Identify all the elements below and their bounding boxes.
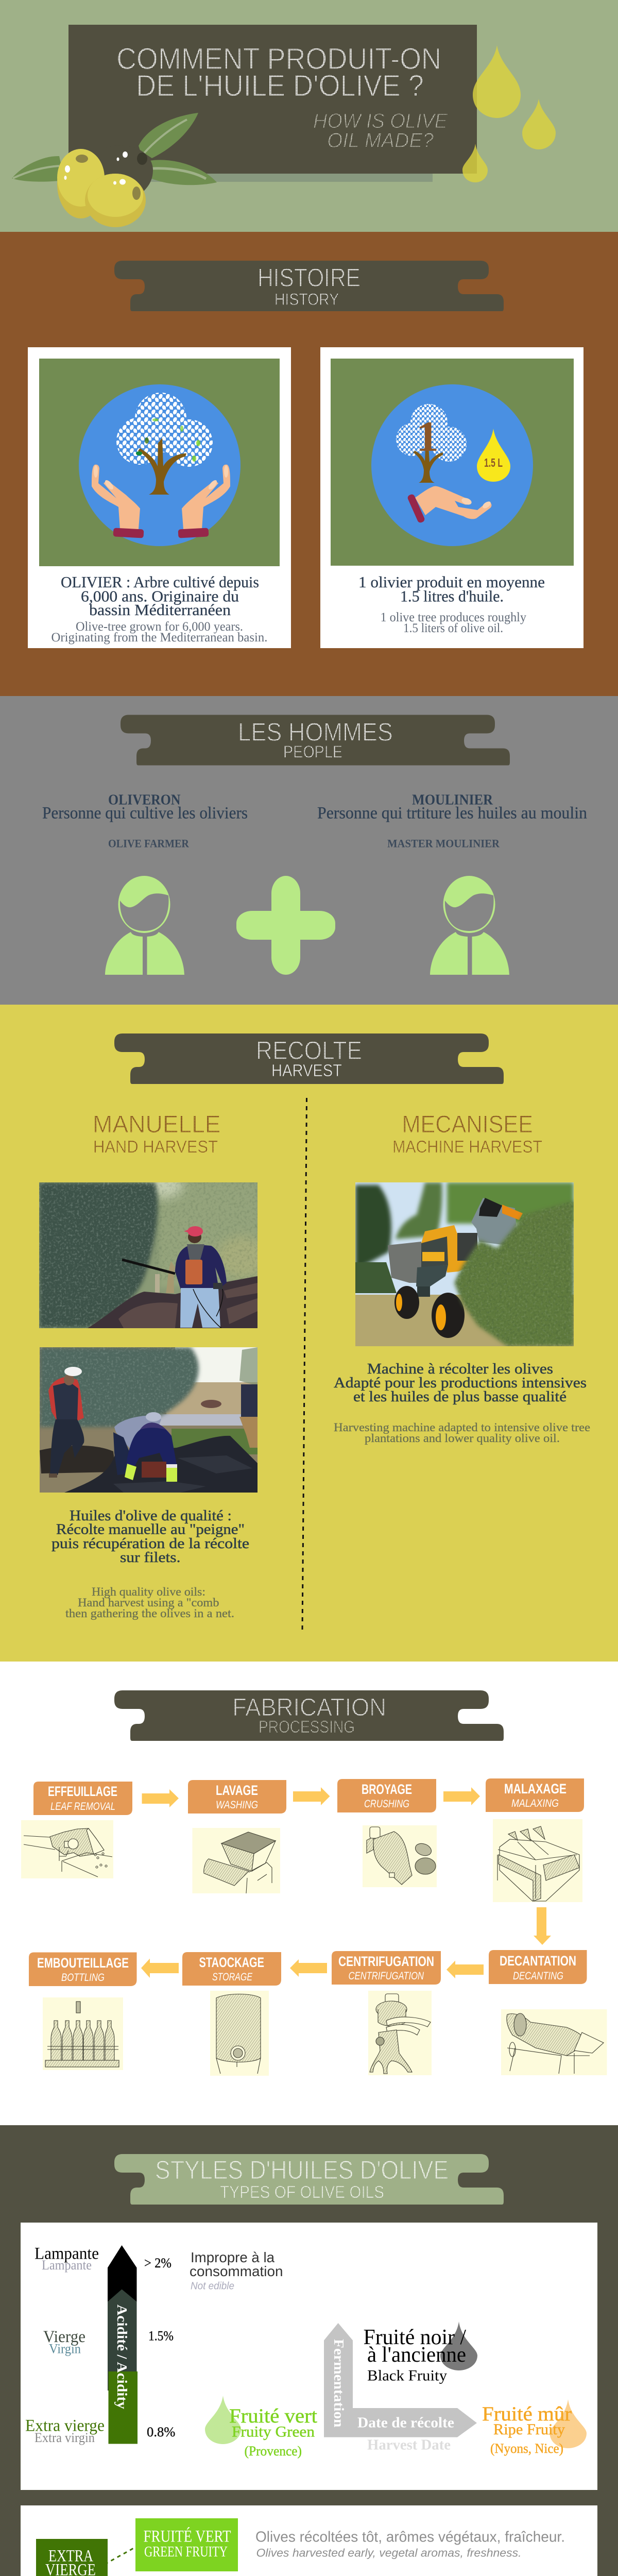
banner: recolte: RECOLTE [256, 1036, 362, 1065]
caption english: 1 olive tree produces roughly [380, 611, 526, 624]
banner: fabrication: FABRICATION [232, 1694, 386, 1721]
description: fruite vert: Olives récoltées tôt, arômes végétaux, fraîcheur. [255, 2529, 565, 2545]
values: acidity percentages: > 2% [144, 2256, 171, 2270]
worker [122, 1226, 227, 1328]
text: hand harvest english: Hand harvest using a "comb [78, 1596, 219, 1609]
text: hand harvest english: High quality olive oils: [92, 1585, 205, 1598]
step: malaxage: MALAXING [511, 1798, 559, 1809]
label: fruite noir [364, 2326, 466, 2384]
machine [388, 1198, 523, 1338]
label: fruite mur [482, 2403, 572, 2456]
icon: orange drop [550, 2399, 587, 2448]
icon: green drop [205, 2396, 241, 2444]
caption: 6,000 ans. Originaire du [81, 587, 239, 605]
label: extra vierge [25, 2416, 105, 2445]
step: stockage [182, 1952, 281, 1986]
worker at edge [239, 1384, 258, 1448]
panel: classification [21, 2505, 597, 2576]
olive bush [454, 1200, 574, 1346]
icon: master miller [430, 876, 509, 975]
text: machine harvest english: plantations and lower quality olive oil. [365, 1432, 560, 1445]
step: centrifugation [332, 1951, 441, 1985]
text: moulinier [317, 792, 587, 850]
section: les hommes [0, 696, 618, 1005]
workers bending [113, 1412, 177, 1482]
icon: oil drop 1.5 L [477, 429, 510, 482]
chart: acidity arrow: Acidité / Acidity [114, 2304, 130, 2410]
step: stockage: STORAGE [212, 1971, 253, 1983]
step: centrifugation: CENTRIFUGATION [348, 1970, 424, 1982]
banner: recolte [114, 1033, 504, 1084]
values: acidity percentages [144, 2256, 175, 2439]
label: fruite vert: (Provence) [244, 2444, 302, 2459]
label: lampante [35, 2244, 99, 2273]
values: acidity percentages: 1.5% [148, 2329, 174, 2343]
title [116, 42, 441, 103]
label: fruite mur: Ripe Fruity [493, 2421, 565, 2438]
banner: recolte: HARVEST [271, 1061, 342, 1080]
banner: les hommes [121, 715, 510, 766]
subtitle [313, 110, 448, 152]
text: hand harvest: Récolte manuelle au "peigne" [56, 1522, 245, 1537]
step: embouteillage: EMBOUTEILLAGE [37, 1955, 129, 1971]
step: decantation: DECANTING [513, 1970, 563, 1982]
text: machine harvest english [334, 1421, 590, 1445]
box: fruite vert: FRUITÉ VERT [143, 2527, 231, 2546]
banner: histoire: HISTORY [274, 290, 339, 309]
banner: fabrication [114, 1690, 504, 1741]
text: hand harvest [52, 1508, 249, 1566]
label: vierge: Vierge [43, 2328, 85, 2346]
note: not edible [190, 2249, 283, 2292]
text: oliveron: Personne qui cultive les oliviers [42, 804, 248, 822]
icon: plus [236, 876, 335, 975]
chart: fermentation and harvest arrows [324, 2323, 477, 2453]
step: lavage: LAVAGE [216, 1783, 258, 1798]
label: vierge: Virgin [49, 2341, 81, 2357]
label: extra vierge: Extra vierge [25, 2416, 105, 2435]
title panel [68, 25, 477, 174]
icon: small tree: 1 [416, 413, 439, 461]
icon: farmer [105, 876, 184, 975]
caption english: Olive-tree grown for 6,000 years. [76, 620, 243, 634]
text: machine harvest [334, 1361, 587, 1405]
text: machine harvest: Adapté pour les productions intensives [334, 1375, 587, 1391]
box: extra vierge: EXTRA [48, 2547, 93, 2566]
note: not edible: Not edible [191, 2280, 234, 2292]
caption: OLIVIER : Arbre cultivé depuis [61, 573, 259, 591]
sketch: centrifugation [368, 1991, 432, 2075]
panel shadow band [68, 174, 433, 182]
chart: fermentation and harvest arrows: Date de récolte [357, 2414, 454, 2431]
box: extra vierge [36, 2539, 108, 2576]
step: malaxage: MALAXAGE [504, 1781, 566, 1797]
text: hand harvest: puis récupération de la récolte [52, 1536, 249, 1552]
caption [358, 573, 545, 605]
step: effeuillage [33, 1782, 132, 1815]
card: oil yield [320, 347, 583, 648]
chart: acidity arrow [108, 2245, 138, 2444]
subtitle: OIL MADE? [327, 129, 434, 152]
icon: olives and leaves [12, 113, 217, 227]
sketch: crushing [363, 1825, 437, 1887]
step: effeuillage: EFFEUILLAGE [48, 1784, 117, 1799]
text: hand harvest english: then gathering the olives in a net. [65, 1607, 234, 1620]
caption [61, 573, 259, 619]
label: extra vierge: Extra virgin [35, 2430, 95, 2445]
sketch: storage tank [210, 1991, 269, 2076]
caption english: 1.5 liters of olive oil. [403, 621, 503, 635]
icon: oil drop 1.5 L: 1.5 L [484, 456, 503, 469]
step: embouteillage [29, 1953, 137, 1986]
step: broyage: BROYAGE [362, 1782, 412, 1797]
icon: oil drops [462, 45, 556, 182]
title: COMMENT PRODUIT-ON [116, 42, 441, 76]
label: vierge [43, 2328, 85, 2357]
sketch: malaxing [493, 1819, 582, 1902]
caption: bassin Méditerranéen [89, 601, 231, 619]
banner: histoire: HISTOIRE [258, 263, 360, 292]
label: fruite noir: Fruité noir / [364, 2326, 466, 2349]
label: lampante: Lampante [42, 2258, 92, 2273]
note: not edible: Impropre à la [191, 2249, 274, 2265]
section: fabrication [0, 1662, 618, 2125]
photo: hand harvest with comb [39, 1182, 258, 1328]
label: fruite noir: Black Fruity [367, 2367, 447, 2384]
section: styles [0, 2125, 618, 2576]
label: fruite vert: Fruité vert [229, 2405, 317, 2427]
step: lavage: WASHING [216, 1799, 258, 1811]
banner: fabrication: PROCESSING [259, 1717, 355, 1736]
icon: open hand [407, 486, 492, 523]
banner: histoire [114, 261, 504, 311]
icon: left hand [92, 465, 144, 538]
section: header [0, 0, 618, 232]
chart: fermentation and harvest arrows: Fermentation [331, 2339, 347, 2428]
text: hand harvest english [65, 1585, 234, 1620]
box: fruite vert [135, 2518, 238, 2571]
caption english: Originating from the Mediterranean basin. [52, 631, 268, 645]
text: oliveron [42, 792, 248, 850]
caption english [380, 611, 526, 635]
connector: extra vierge to fruite vert [98, 2547, 135, 2568]
arrow: decantation to centrifugation [447, 1961, 484, 1978]
text: moulinier: Personne qui trtiture les huiles au moulin [317, 804, 587, 822]
arrow: lavage to broyage [293, 1787, 330, 1805]
divider [302, 1098, 307, 1631]
step: broyage: CRUSHING [364, 1798, 409, 1810]
arrow: malaxage to decantation [534, 1907, 551, 1945]
step: centrifugation: CENTRIFUGATION [338, 1954, 434, 1969]
subtitle: HOW IS OLIVE [313, 110, 448, 132]
banner: les hommes: LES HOMMES [238, 718, 393, 747]
icon: small tree [396, 404, 467, 483]
section: recolte [0, 1005, 618, 1662]
label: fruite mur: Fruité mûr [482, 2403, 572, 2425]
sketch: decanting [501, 2009, 607, 2075]
step: decantation [489, 1950, 587, 1984]
card: olive tree [28, 347, 291, 648]
heading: manuelle: MANUELLE [93, 1110, 220, 1138]
arrow: centrifugation to stockage [290, 1959, 327, 1977]
note: not edible: consommation [190, 2263, 283, 2279]
description: fruite vert: Olives harvested early, vegetal aromas, freshness. [256, 2546, 521, 2560]
text: machine harvest english: Harvesting machine adapted to intensive olive tree [334, 1421, 590, 1434]
box: fruite vert: GREEN FRUITY [144, 2544, 228, 2560]
panel: chart [21, 2223, 597, 2490]
step: stockage: STAOCKAGE [199, 1955, 264, 1970]
text: hand harvest: sur filets. [120, 1550, 180, 1566]
arrow: stockage to embouteillage [141, 1959, 179, 1978]
heading: mecanisee [392, 1110, 542, 1156]
arrow: broyage to malaxage [443, 1787, 480, 1805]
label: fruite vert: Fruity Green [232, 2424, 315, 2440]
chart: fermentation and harvest arrows: Harvest Date [367, 2437, 451, 2453]
step: broyage [337, 1779, 436, 1812]
step: decantation: DECANTATION [500, 1953, 576, 1969]
banner: styles: TYPES OF OLIVE OILS [220, 2182, 384, 2201]
text: machine harvest: et les huiles de plus basse qualité [353, 1389, 566, 1405]
sketch: washing [193, 1828, 280, 1893]
label: fruite noir: à l'ancienne [367, 2343, 466, 2367]
icon: black drop [440, 2321, 477, 2370]
text: machine harvest: Machine à récolter les olives [367, 1361, 553, 1377]
heading: mecanisee: MECANISEE [402, 1110, 533, 1138]
text: hand harvest: Huiles d'olive de qualité : [70, 1508, 232, 1524]
text: moulinier: MOULINIER [412, 792, 493, 808]
sketch: bottles [43, 1997, 123, 2070]
label: fruite mur: (Nyons, Nice) [490, 2441, 563, 2456]
caption: 1 olivier produit en moyenne [358, 573, 545, 591]
banner: les hommes: PEOPLE [283, 742, 342, 761]
worker standing [48, 1367, 84, 1478]
caption english [52, 620, 268, 645]
step: malaxage [486, 1778, 584, 1812]
arrow: effeuillage to lavage [142, 1789, 179, 1807]
values: acidity percentages: 0.8% [147, 2425, 175, 2439]
banner: styles: STYLES D'HUILES D'OLIVE [155, 2156, 449, 2184]
label: fruite vert [229, 2405, 317, 2459]
step: effeuillage: LEAF REMOVAL [50, 1801, 115, 1812]
heading: manuelle: HAND HARVEST [93, 1137, 218, 1156]
description: fruite vert [255, 2529, 565, 2560]
photo: harvesting machine [355, 1182, 574, 1346]
icon: tree [116, 393, 213, 495]
label: lampante: Lampante [35, 2244, 99, 2263]
banner: styles [114, 2154, 504, 2205]
step: lavage [188, 1780, 286, 1814]
sketch: leaf removal [21, 1820, 113, 1878]
text: oliveron: OLIVERON [108, 792, 180, 808]
section: histoire [0, 232, 618, 696]
heading: manuelle [93, 1110, 220, 1156]
photo: workers gathering olives [40, 1347, 258, 1493]
caption: 1.5 litres d'huile. [400, 587, 504, 605]
icon: right hand [178, 465, 230, 538]
title: DE L'HUILE D'OLIVE ? [136, 69, 424, 103]
step: embouteillage: BOTTLING [61, 1972, 105, 1984]
text: oliveron: OLIVE FARMER [108, 837, 190, 850]
heading: mecanisee: MACHINE HARVEST [392, 1137, 542, 1156]
text: moulinier: MASTER MOULINIER [387, 837, 500, 850]
